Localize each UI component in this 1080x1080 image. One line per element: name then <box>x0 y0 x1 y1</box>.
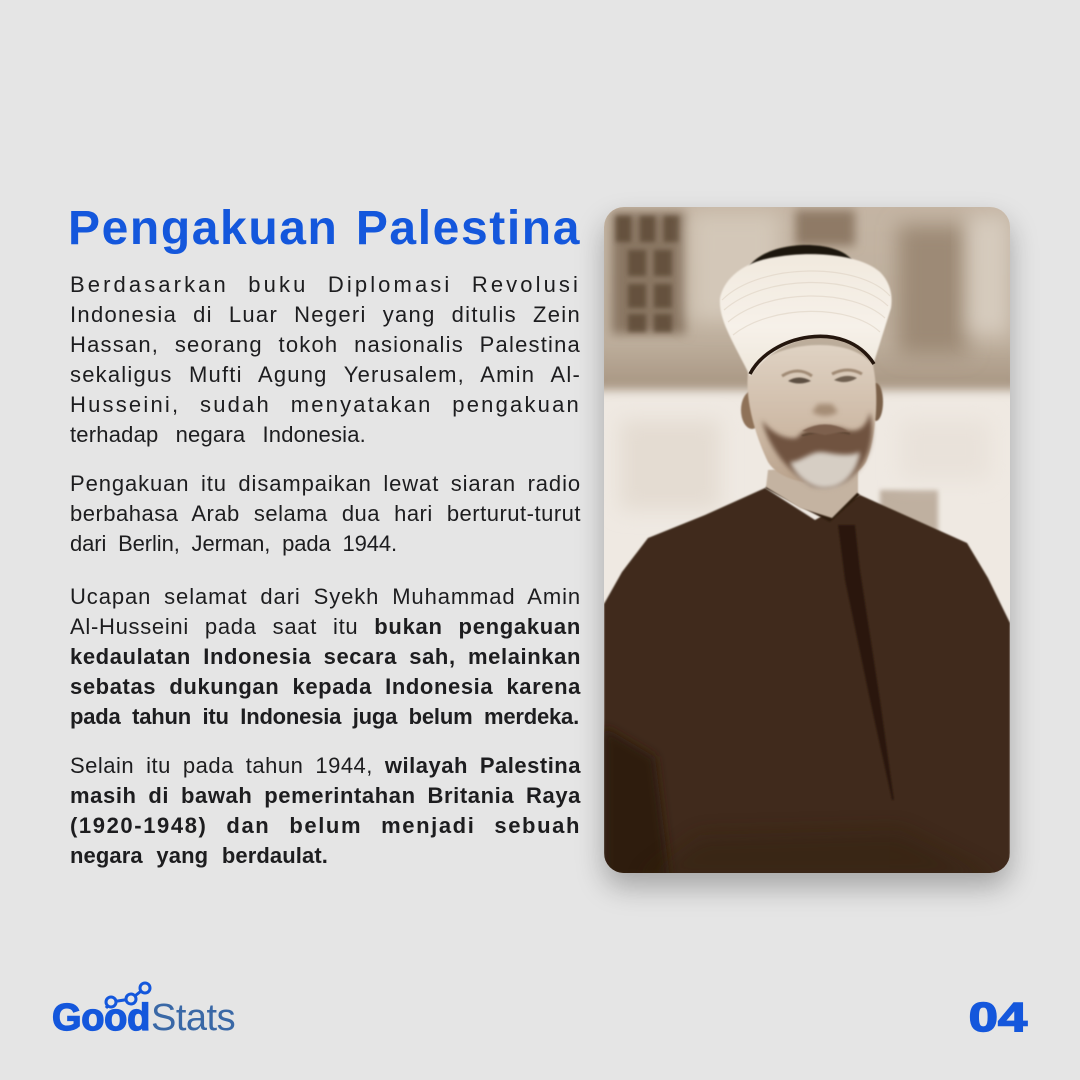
text block: paragraph 1: Indonesia di Luar Negeri yang ditulis Zein <box>70 302 581 327</box>
logo wordmark: GoodStats <box>52 997 235 1039</box>
text block: paragraph 4: Selain itu pada tahun 1944, wilayah Palestina <box>70 753 581 778</box>
text block: paragraph 4: masih di bawah pemerintahan Britania Raya <box>70 783 581 808</box>
logo: GoodStats <box>52 982 235 1039</box>
turban crown <box>748 245 852 268</box>
text block: paragraph 2: berbahasa Arab selama dua hari berturut-turut <box>70 501 581 526</box>
text block: paragraph 2: Pengakuan itu disampaikan lewat siaran radio <box>70 471 581 496</box>
icon: trend line <box>104 982 152 1009</box>
text block: paragraph 4: (1920-1948) dan belum menjadi sebuah <box>70 813 581 838</box>
text block: paragraph 1: sekaligus Mufti Agung Yerusalem, Amin Al- <box>70 362 581 387</box>
text block: paragraph 3: Ucapan selamat dari Syekh Muhammad Amin <box>70 584 581 609</box>
text block: paragraph 1: terhadap negara Indonesia. <box>70 422 366 447</box>
beard <box>762 412 872 488</box>
ears <box>741 383 883 429</box>
robe <box>604 480 1010 880</box>
facial features <box>782 370 862 416</box>
turban <box>720 254 892 376</box>
text block: paragraph 1: Husseini, sudah menyatakan pengakuan <box>70 392 581 417</box>
neck <box>766 465 858 518</box>
text block: paragraph 3: Al-Husseini pada saat itu bukan pengakuan <box>70 614 581 639</box>
text block: paragraph 3: pada tahun itu Indonesia juga belum merdeka. <box>70 704 579 729</box>
text block: paragraph 3 <box>70 584 581 729</box>
page number: 04 <box>969 994 1027 1040</box>
background wall <box>594 197 1020 873</box>
text block: paragraph 1 <box>70 272 581 447</box>
photo: portrait of Amin Al-Husseini <box>604 207 1010 873</box>
text block: paragraph 3: sebatas dukungan kepada Indonesia karena <box>70 674 581 699</box>
text block: paragraph 1: Hassan, seorang tokoh nasionalis Palestina <box>70 332 581 357</box>
text block: paragraph 2 <box>70 471 581 556</box>
title: Pengakuan Palestina <box>68 202 581 255</box>
text block: paragraph 4: negara yang berdaulat. <box>70 843 328 868</box>
text block: paragraph 2: dari Berlin, Jerman, pada 1944. <box>70 531 397 556</box>
text block: paragraph 4 <box>70 753 581 868</box>
face <box>747 345 876 483</box>
text block: paragraph 3: kedaulatan Indonesia secara sah, melainkan <box>70 644 581 669</box>
text block: paragraph 1: Berdasarkan buku Diplomasi Revolusi <box>70 272 581 297</box>
